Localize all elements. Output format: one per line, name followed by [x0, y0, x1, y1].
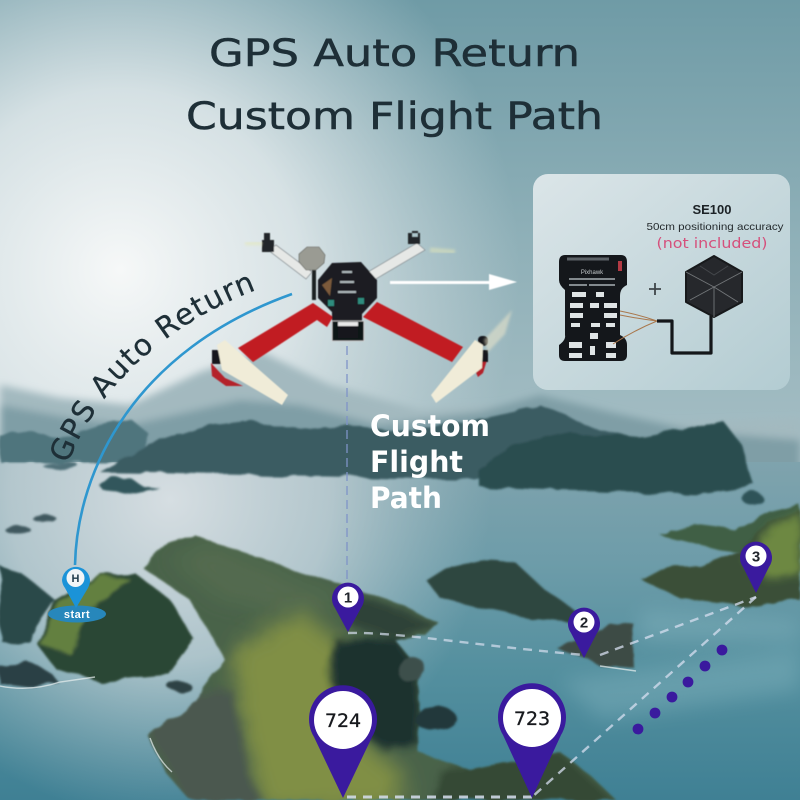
shoreline foam	[0, 666, 636, 772]
drone	[211, 231, 512, 405]
drone: rear propeller haze	[245, 243, 455, 252]
waypoint pin 1: 1	[344, 590, 352, 606]
icon: plus sign	[649, 283, 661, 295]
flight path: vertical dashed descent	[346, 346, 348, 582]
panel note: not included: (not included)	[656, 236, 768, 252]
waypoint pin 723	[498, 683, 566, 798]
icon: flight controller	[559, 255, 627, 361]
heading: title: GPS Auto Return	[209, 32, 580, 75]
panel: SE100 module	[533, 174, 790, 390]
panel title: SE100: SE100	[692, 202, 732, 217]
drone: front motors	[212, 350, 222, 364]
island: bottom dark rock	[415, 707, 457, 731]
waypoint pin 3	[740, 542, 772, 593]
drone: GPS puck	[299, 247, 325, 270]
waypoint dots	[633, 645, 727, 734]
label: Custom Flight Path: Flight	[370, 445, 463, 479]
island: central rock	[426, 560, 575, 622]
icon: connecting wires	[613, 311, 657, 344]
island: far-left dark hill	[0, 566, 55, 642]
arrow: GPS return arc	[75, 294, 292, 565]
waypoint pin 724: 724	[325, 710, 361, 732]
distant islands	[0, 405, 800, 560]
waypoint pin 724	[309, 685, 377, 798]
start pin: H	[72, 573, 80, 585]
waypoint pin 723: 723	[514, 708, 550, 730]
drone: body	[318, 262, 377, 326]
drone: front propellers	[217, 340, 288, 405]
curved label: GPS Auto Return: GPS Auto Return	[51, 276, 254, 460]
drone: battery cage	[332, 321, 364, 341]
island: round left hill	[38, 573, 195, 682]
waypoint pin 2	[568, 608, 600, 658]
drone: rear motors	[262, 231, 420, 252]
flight path: dashed route between waypoints	[343, 597, 756, 797]
waypoint pin 3: 3	[752, 548, 760, 566]
drone: GPS mast	[312, 268, 316, 300]
island: main green ridge	[140, 530, 640, 800]
panel note: positioning accuracy: 50cm positioning accuracy	[646, 221, 784, 233]
foreground islands	[0, 510, 800, 800]
sea	[0, 462, 800, 800]
waypoint pin 2: 2	[580, 614, 588, 632]
island: left rocks	[0, 660, 58, 688]
island: waypoint 2 rock	[556, 622, 634, 668]
drone: red arms	[238, 303, 333, 362]
icon: flight controller: Pixhawk	[581, 270, 604, 276]
label: Custom Flight Path: Custom	[370, 409, 490, 443]
distant mountains	[0, 352, 800, 500]
island: right green headland	[642, 510, 800, 606]
icon: GPS module	[686, 256, 742, 317]
heading: title: Custom Flight Path	[186, 95, 603, 138]
icon: GPS cable	[657, 316, 711, 353]
label: Custom Flight Path	[370, 409, 490, 515]
drone: red arm ends	[211, 360, 487, 386]
label: Custom Flight Path: Path	[370, 481, 442, 515]
start pin	[48, 567, 106, 622]
arrow: white pointer to module panel	[390, 274, 517, 290]
waypoint pin 1	[332, 583, 364, 632]
start pin: start	[64, 609, 90, 621]
heading: title	[186, 32, 603, 138]
drone: rear white arms	[268, 243, 425, 280]
